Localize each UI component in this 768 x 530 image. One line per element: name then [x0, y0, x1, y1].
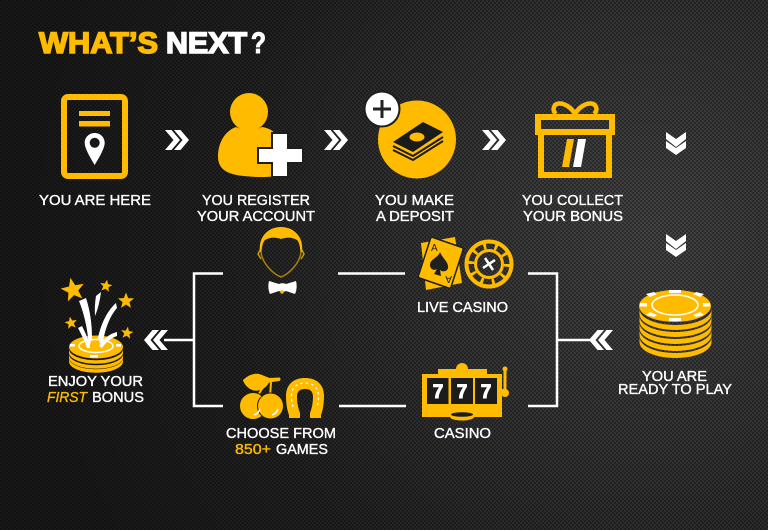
icon: cards and roulette wheel: A	[445, 273, 452, 284]
label: you make a deposit: A DEPOSIT	[376, 209, 454, 225]
label: you are ready to play	[618, 369, 732, 398]
icon: slot machine: 7	[481, 382, 491, 403]
arrow: step 1 to 2	[165, 130, 189, 150]
icon: chip stack	[639, 290, 712, 358]
arrow: left chevrons from ready to play	[589, 330, 613, 350]
connector: live casino to dealer	[338, 272, 405, 275]
label: you are here: YOU ARE HERE	[39, 193, 151, 209]
label: you make a deposit: YOU MAKE	[375, 193, 454, 209]
label: live casino: LIVE CASINO	[417, 300, 508, 316]
step: you are ready to play	[618, 290, 732, 398]
label: you collect your bonus	[522, 193, 623, 225]
step: you register	[197, 93, 315, 225]
option: dealer	[258, 227, 304, 294]
label: you make a deposit	[375, 193, 454, 225]
arrow: left chevrons to bonus	[144, 330, 168, 350]
icon: slot machine	[422, 363, 509, 420]
icon: slot machine: 7	[457, 382, 467, 403]
label: you register your account	[197, 193, 315, 225]
label: you are ready to play: YOU ARE	[642, 369, 707, 385]
step: enjoy your first bonus	[47, 275, 144, 406]
step: you make a deposit	[364, 90, 456, 225]
label: enjoy your first bonus	[47, 374, 144, 406]
icon: gift box	[538, 103, 612, 175]
option: casino	[422, 363, 509, 442]
label: you register your account: YOUR ACCOUNT	[197, 209, 315, 225]
label: you collect your bonus: YOU COLLECT	[522, 193, 623, 209]
arrow: step 2 to 3	[324, 130, 348, 150]
title: ?	[251, 27, 266, 60]
title: WHAT’S	[39, 27, 158, 60]
label: you collect your bonus: YOUR BONUS	[523, 209, 623, 225]
option: choose from games	[226, 374, 336, 458]
icon: cherries and horseshoe	[240, 374, 324, 420]
icon: person with plus	[218, 93, 304, 178]
icon: slot machine: 7	[433, 382, 443, 403]
icon: cards and roulette wheel: A	[431, 243, 438, 254]
label: choose from 850+ games: 850+	[235, 442, 271, 458]
label: you register your account: YOU REGISTER	[202, 193, 310, 209]
label: casino: CASINO	[434, 426, 491, 442]
label: choose from 850+ games: GAMES	[276, 442, 328, 458]
icon: coin with banknotes and plus badge	[364, 90, 456, 178]
connector: casino to games	[339, 405, 406, 407]
label: choose from 850+ games: CHOOSE FROM	[226, 426, 336, 442]
arrow: down chevrons lower	[666, 234, 686, 257]
icon: cards and roulette wheel	[418, 237, 512, 290]
label: enjoy your first bonus: BONUS	[92, 390, 144, 406]
option: live casino	[417, 237, 512, 316]
label: you are ready to play: READY TO PLAY	[618, 382, 732, 398]
label: enjoy your first bonus: ENJOY YOUR	[48, 374, 143, 390]
step: you collect your bonus	[522, 103, 623, 225]
icon: exploding chips and stars	[59, 275, 134, 373]
title: NEXT	[166, 27, 247, 60]
left bracket connector	[164, 274, 223, 406]
arrow: step 3 to 4	[482, 130, 506, 150]
arrow: down chevrons upper	[666, 132, 686, 155]
title	[39, 27, 266, 60]
label: enjoy your first bonus: FIRST	[47, 390, 88, 406]
step: you are here	[39, 97, 151, 209]
right bracket connector	[528, 274, 593, 406]
icon: document with map pin	[64, 97, 125, 176]
icon: dealer head and bow tie	[258, 227, 304, 294]
label: choose from 850+ games	[226, 426, 336, 458]
